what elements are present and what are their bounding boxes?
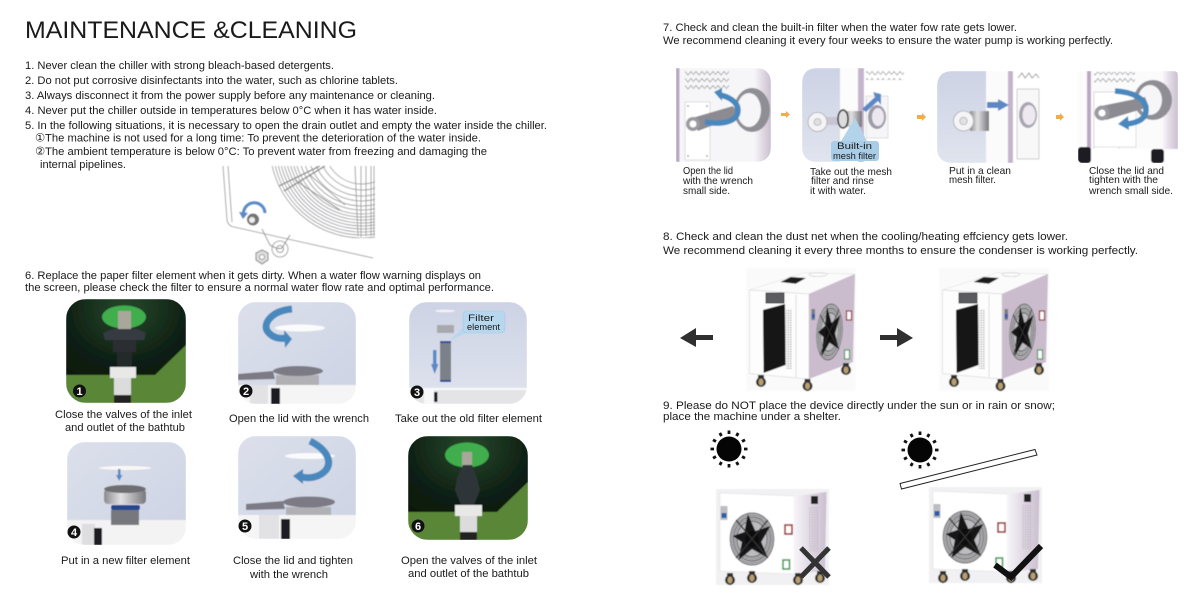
- icon: left arrow: [680, 328, 713, 347]
- icon: cross mark: [801, 548, 829, 577]
- left page: title: MAINTENANCE &CLEANING: [25, 17, 357, 44]
- illustration: machine in direct sun: [716, 489, 829, 585]
- captions: step 7 illustrations: with the wrench: [682, 176, 753, 187]
- panel: step 2 open the lid: [238, 302, 356, 404]
- step 9 instruction: 9. Please do NOT place the device directly under the sun or in rain or snow;: [663, 400, 1055, 412]
- captions: step 7 illustrations: [682, 166, 1173, 197]
- badge: 3: [410, 386, 424, 399]
- panel: open the lid with wrench: [676, 68, 771, 162]
- step 7 instruction: 7. Check and clean the built-in filter when the water fow rate gets lower.: [663, 22, 1017, 34]
- captions: step 7 illustrations: wrench small side.: [1088, 186, 1173, 197]
- badge: 1: [73, 384, 86, 398]
- illustration: machine under shelter: [929, 487, 1042, 583]
- icon: sun: [710, 430, 748, 468]
- rules list 1 to 5: ①The machine is not used for a long time: To prevent the deterioration of the water inside.: [35, 132, 481, 144]
- step 9 instruction: [663, 400, 1055, 423]
- badge: 4: [68, 526, 80, 539]
- step 7 instruction: We recommend cleaning it every four weeks to ensure the water pump is working perfectly.: [663, 35, 1113, 47]
- callout: built-in mesh filter: mesh filter: [833, 150, 876, 161]
- badge: 6: [412, 520, 424, 533]
- step 8 instruction: We recommend cleaning it every three months to ensure the condenser is working perfectly.: [663, 245, 1138, 257]
- illustration: drain outlet: [222, 165, 376, 265]
- badge: 5: 5: [242, 521, 248, 533]
- rules list 1 to 5: 3. Always disconnect it from the power supply before any maintenance or cleaning.: [25, 90, 435, 102]
- panel: step 3 remove the filter: [409, 302, 527, 404]
- panel: put in clean mesh filter: [937, 71, 1042, 163]
- callout: filter element: element: [467, 321, 500, 332]
- captions: step 6 illustrations: Open the lid with the wrench: [229, 413, 369, 425]
- captions: step 6 illustrations: Close the lid and tighten: [233, 555, 353, 567]
- icon: check mark: [995, 546, 1041, 577]
- captions: step 7 illustrations: Close the lid and: [1089, 166, 1164, 177]
- badge: 3: 3: [414, 387, 420, 399]
- panel: step 6 open the valves: [408, 436, 528, 540]
- rules list 1 to 5: 4. Never put the chiller outside in temperatures below 0°C when it has water inside.: [25, 105, 437, 117]
- rules list 1 to 5: [25, 60, 547, 171]
- icon: orange arrow: [917, 113, 926, 121]
- captions: step 6 illustrations: and outlet of the bathtub: [65, 422, 185, 434]
- captions: step 7 illustrations: small side.: [683, 186, 730, 197]
- badge: 5: [238, 520, 252, 533]
- captions: step 6 illustrations: with the wrench: [249, 569, 328, 581]
- step 8 instruction: 8. Check and clean the dust net when the cooling/heating effciency gets lower.: [663, 231, 1068, 243]
- rules list 1 to 5: 1. Never clean the chiller with strong bleach-based detergents.: [25, 60, 334, 72]
- panel: close lid with wrench: [1078, 71, 1178, 163]
- captions: step 6 illustrations: Put in a new filter element: [61, 555, 191, 567]
- captions: step 7 illustrations: mesh filter.: [949, 175, 996, 186]
- rules list 1 to 5: ②The ambient temperature is below 0°C: To prevent water from freezing and damaging the: [35, 146, 487, 158]
- step 6 instruction: the screen, please check the filter to ensure a normal water flow rate and optimal performance.: [25, 282, 494, 294]
- badge: 6: 6: [415, 521, 421, 533]
- illustration: chiller remove dust net: [746, 268, 856, 391]
- callout: built-in mesh filter: [831, 118, 879, 161]
- captions: step 6 illustrations: Close the valves of the inlet: [55, 409, 193, 421]
- captions: step 7 illustrations: tighten with the: [1089, 175, 1158, 186]
- captions: step 7 illustrations: it with water.: [810, 186, 866, 197]
- callout: built-in mesh filter: Built-in: [837, 140, 872, 151]
- panel: step 1 close the valves: [66, 299, 186, 403]
- panel: step 5 close the lid: [238, 436, 356, 539]
- badge: 2: 2: [243, 386, 249, 398]
- captions: step 6 illustrations: Take out the old filter element: [395, 413, 543, 425]
- rules list 1 to 5: 5. In the following situations, it is necessary to open the drain outlet and empty the water inside the chiller.: [25, 120, 547, 132]
- captions: step 6 illustrations: [55, 409, 543, 581]
- callout: filter element: Filter: [468, 312, 494, 323]
- rules list 1 to 5: internal pipelines.: [40, 159, 126, 171]
- badge: 1: 1: [76, 386, 83, 398]
- rules list 1 to 5: 2. Do not put corrosive disinfectants into the water, such as chlorine tablets.: [25, 75, 398, 87]
- captions: step 6 illustrations: Open the valves of the inlet: [401, 555, 538, 567]
- captions: step 7 illustrations: Open the lid: [683, 166, 733, 177]
- captions: step 6 illustrations: and outlet of the bathtub: [408, 568, 529, 580]
- callout: filter element: [449, 311, 505, 341]
- step 6 instruction: 6. Replace the paper filter element when it gets dirty. When a water flow warning displays on: [25, 270, 481, 282]
- icon: orange arrow: [781, 111, 790, 118]
- step 8 instruction: [663, 231, 1138, 257]
- step 9 instruction: place the machine under a shelter.: [663, 411, 841, 423]
- illustration: shelter board: [900, 450, 1037, 489]
- badge: 2: [240, 384, 252, 398]
- icon: orange arrow: [1056, 113, 1064, 121]
- panel: take out mesh filter: [802, 68, 905, 162]
- icon: right arrow: [880, 328, 913, 347]
- step 6 instruction: [25, 270, 494, 294]
- icon: sun above shelter: [902, 432, 938, 468]
- captions: step 7 illustrations: Put in a clean: [949, 166, 1011, 177]
- captions: step 7 illustrations: Take out the mesh: [810, 167, 892, 178]
- panel: step 4 new filter: [67, 442, 186, 545]
- step 7 instruction: [663, 22, 1113, 47]
- captions: step 7 illustrations: filter and rinse: [811, 176, 874, 187]
- illustration: chiller with dust net: [939, 268, 1049, 391]
- badge: 4: 4: [71, 527, 78, 539]
